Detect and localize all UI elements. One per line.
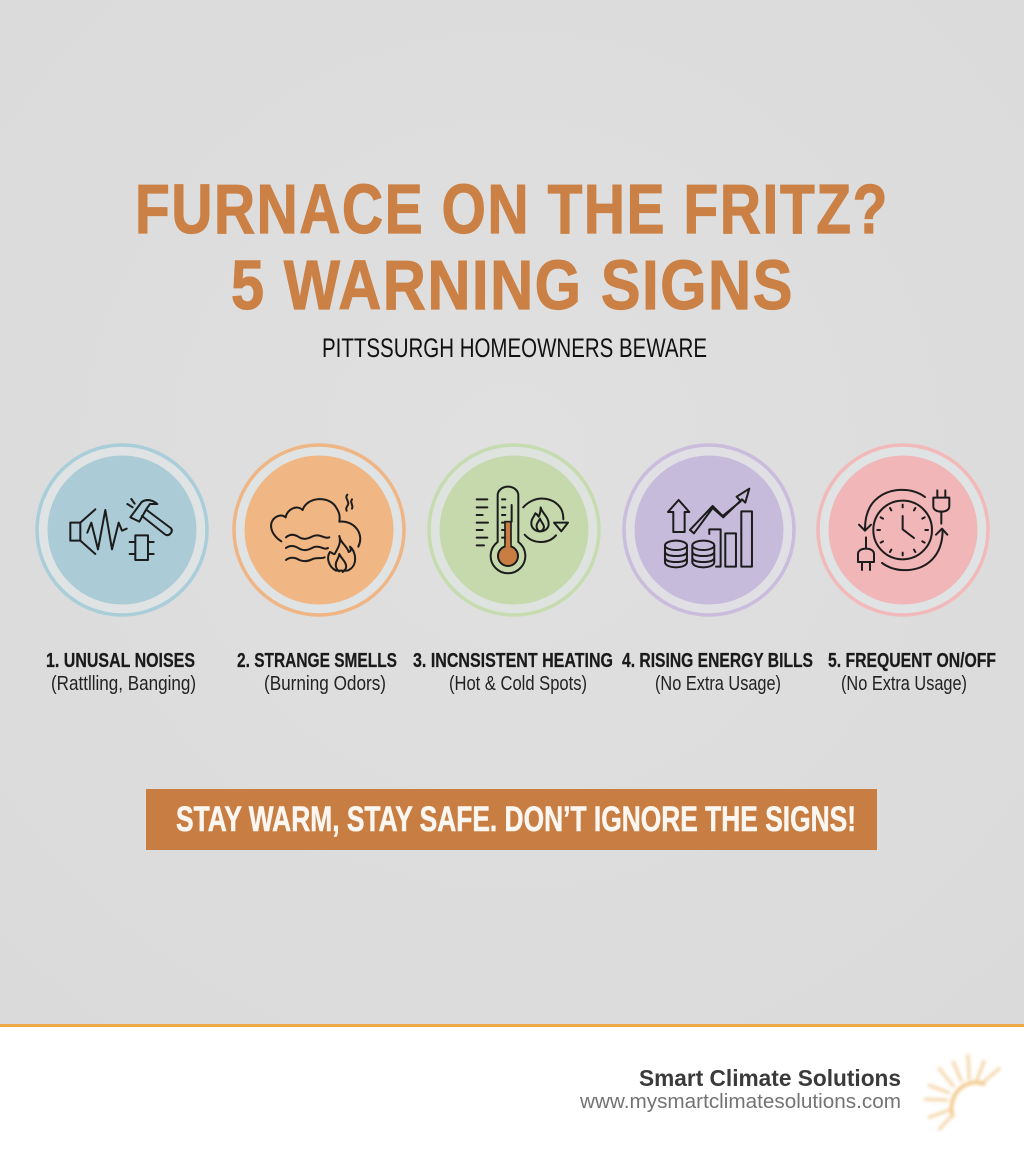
- label: sign 2: (Burning Odors): [264, 673, 386, 695]
- label: sign 4: (No Extra Usage): [655, 673, 781, 695]
- footer: [0, 1024, 1024, 1154]
- website: www.mysmartclimatesolutions.com: [579, 1090, 901, 1113]
- label: sign 3: (Hot & Cold Spots): [449, 673, 587, 695]
- icon: speaker, sound wave, hammer and part: [70, 499, 172, 560]
- icon circle: sign 2: [234, 445, 404, 615]
- label: sign 2: 2. STRANGE SMELLS: [237, 650, 397, 672]
- label: sign 4: 4. RISING ENERGY BILLS: [622, 650, 813, 672]
- label: sign 1: 1. UNUSAL NOISES: [46, 650, 195, 672]
- subtitle: PITTSSURGH HOMEOWNERS BEWARE: [322, 333, 707, 363]
- panel: sign 3 inconsistent heating: [413, 445, 613, 695]
- label: sign 2: [237, 650, 397, 695]
- label: sign 1: [46, 650, 196, 695]
- callout banner: [146, 789, 877, 850]
- title: [135, 170, 889, 324]
- brand name: Smart Climate Solutions: [639, 1065, 901, 1091]
- icon circle: sign 1: [37, 445, 207, 615]
- panel: sign 1 unusal noises: [37, 445, 207, 695]
- label: sign 3: 3. INCNSISTENT HEATING: [413, 650, 613, 672]
- panel: sign 2 strange smells: [234, 445, 404, 695]
- logo: sun: [925, 1055, 999, 1129]
- label: sign 5: [828, 650, 996, 695]
- icon: up arrow, coins, bars and trend arrow: [665, 489, 752, 567]
- icon: thermometer with flame cycle: [477, 487, 568, 573]
- label: sign 1: (Rattlling, Banging): [51, 673, 196, 695]
- label: sign 5: (No Extra Usage): [841, 673, 967, 695]
- label: sign 3: [413, 650, 613, 695]
- title: 5 WARNING SIGNS: [231, 246, 794, 324]
- icon: clock with cycle arrows and plugs: [858, 490, 949, 570]
- label: sign 4: [622, 650, 813, 695]
- panel: sign 4 rising energy bills: [622, 445, 813, 695]
- icon circle: sign 3: [429, 445, 599, 615]
- icon: cloud, odor waves and flame: [271, 495, 360, 572]
- icon circle: sign 4: [624, 445, 794, 615]
- panel: sign 5 frequent on/off: [818, 445, 996, 695]
- icon circle: sign 5: [818, 445, 988, 615]
